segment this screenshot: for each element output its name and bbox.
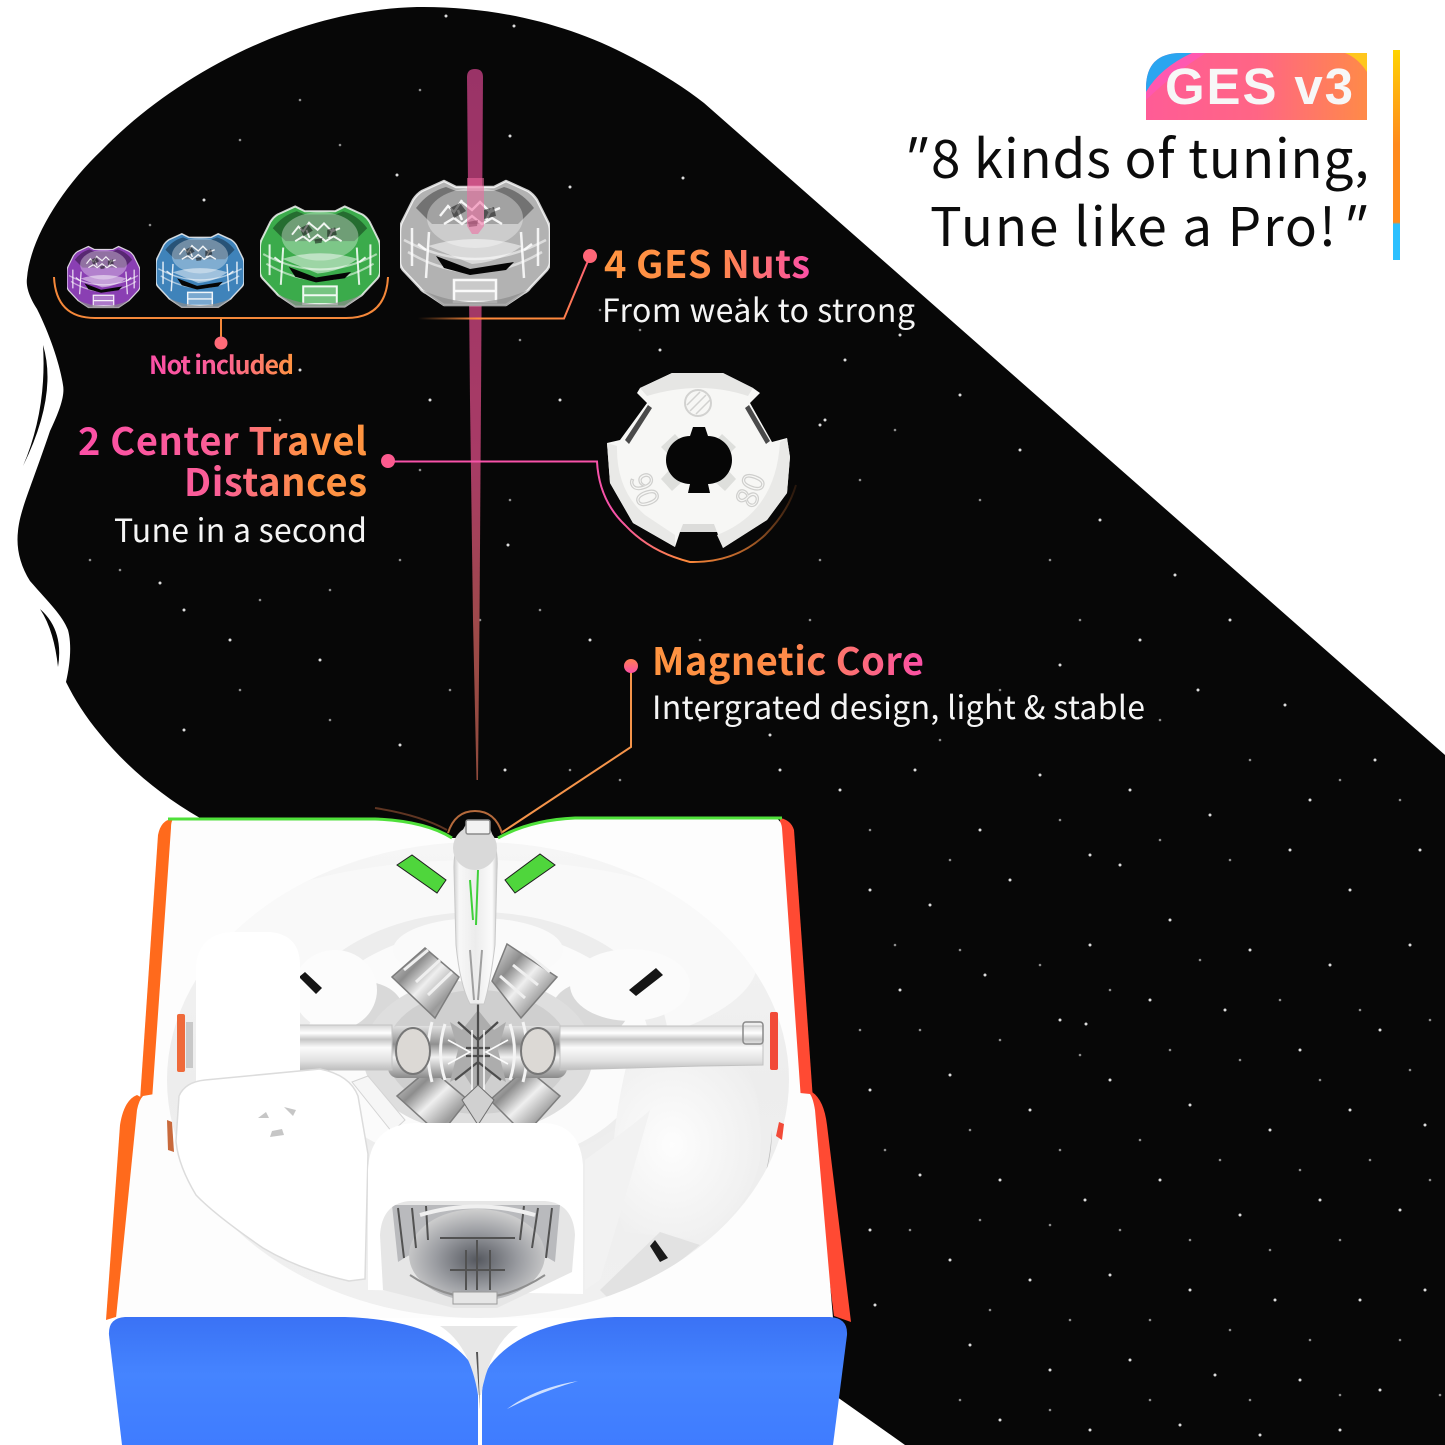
gap below bowl [440,1326,518,1395]
callout: 4 GES Nuts: From weak to strong [602,286,915,332]
side slits [167,1012,784,1152]
central star [450,1010,506,1096]
back row orange band [140,819,176,1100]
leader: center travel [381,454,796,562]
large ball right [620,1068,718,1194]
core: vertical axle [454,822,497,1004]
callout: 4 GES Nuts [602,234,915,332]
front row red band [806,1092,851,1322]
nut: green [260,206,380,307]
leader: 4 GES nuts [418,249,597,318]
cube: cutaway 2x2 [106,818,851,1445]
back row red band [780,818,813,1100]
part: center travel disc [607,373,790,548]
heading: tune like a pro: Tune like a Pro! [930,186,1336,262]
front row white top [116,1092,833,1318]
lower right curved plates [585,1110,650,1290]
side lobes [300,950,377,1024]
blue sheen [507,1381,578,1409]
white capsule [352,1076,405,1132]
heading: tune like a pro [897,118,1369,262]
callout: 2 Center Travel Distances: Distances [184,452,367,507]
accent bar [1393,50,1400,260]
blue face left [109,1317,478,1445]
callout: 2 Center Travel Distances [78,411,367,552]
beam overlay on clear nut [467,178,484,234]
front piece window with nut [380,1201,575,1308]
white shell: left piece [176,1069,368,1281]
axis beam [467,69,483,780]
nut: blue [156,234,244,308]
heading: tune like a pro: 8 kinds of tuning, [931,118,1369,194]
callout: 2 Center Travel Distances: Tune in a second [114,506,367,552]
white block: front corner piece [368,1123,583,1294]
cylinders [388,1026,463,1078]
callout: Magnetic Core: Magnetic Core [652,631,924,686]
bracket: not included [54,277,388,350]
core: silver assembly [386,944,570,1135]
arms [392,948,459,1018]
nut: clear [400,181,550,306]
label: not included: Not included [149,346,294,382]
nut: purple [67,246,140,308]
axle tip detail [453,820,763,1044]
core: horizontal axle [298,1025,763,1070]
back row white top [152,818,801,1100]
white hub rings [300,913,666,1026]
part: center travel disc: 80 [722,466,774,512]
green edge [168,818,782,838]
heading: tune like a pro: " [1336,186,1367,262]
badge: GES v3: GES v3 [1165,58,1353,115]
callout: 2 Center Travel Distances: 2 Center Travel [78,411,367,466]
green tiles [397,854,555,893]
heading: tune like a pro: " [897,118,928,194]
front row orange band [106,1095,146,1320]
blue face right [482,1317,847,1445]
white block: upper left corner piece [196,932,300,1084]
leader: magnetic core [375,659,638,833]
callout: Magnetic Core [652,631,1145,729]
callout: Magnetic Core: Intergrated design, light & stable [652,683,1145,729]
callout: 4 GES Nuts: 4 GES Nuts [604,234,810,289]
black slits [299,968,663,996]
back dome white [664,975,754,1026]
top pill [393,918,563,982]
part: center travel disc: 90 [621,466,673,512]
inner bowl [160,840,800,1320]
magnets [396,1028,555,1074]
